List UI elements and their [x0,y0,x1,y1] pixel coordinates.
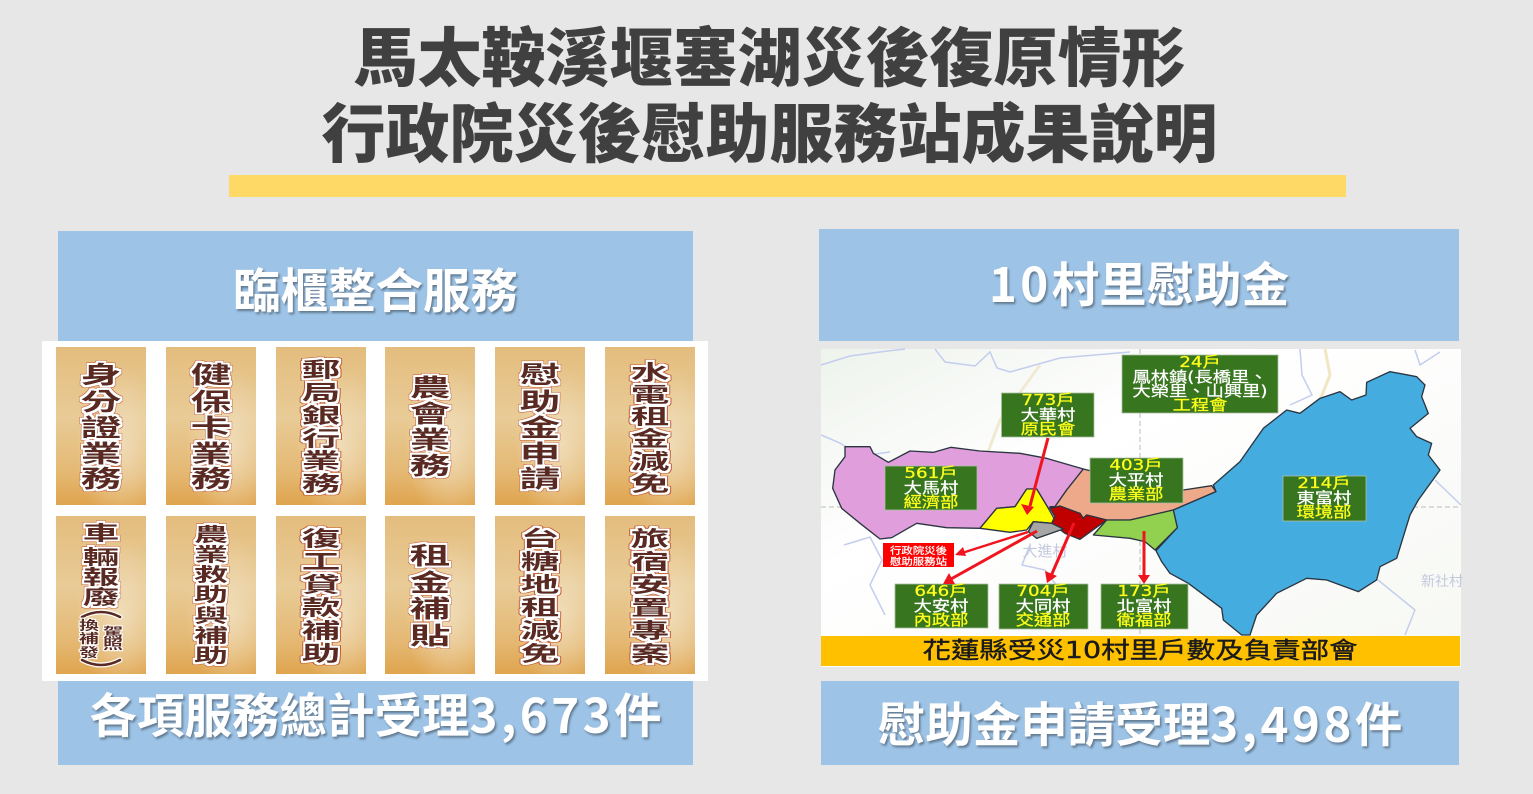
card: health card services: 保 [191,382,231,417]
text: service total: 各項服務總計受理3,673件 [89,678,662,747]
card: lodging program: 置 [631,591,669,621]
label: Dama village: 大馬村 [904,479,959,497]
label: Dongfu village: 東富村 [1297,489,1352,507]
label: Daping village [1090,456,1183,503]
card: agricultural relief: 補 [194,620,228,647]
card: Taisugar land rent reduction: 台 [521,522,559,552]
card: lodging program: 旅 [631,522,669,552]
label: Fenglin township: 24戶 [1179,353,1221,371]
label: Dama village [885,464,977,511]
card: ID services: 務 [81,459,121,494]
card: ID services: 業 [81,434,121,469]
map rivers and roads: 新社村 [1421,574,1463,590]
title: 馬太鞍溪堰塞湖災後復原情形 [354,8,1186,100]
card: rent subsidy: 貼 [410,616,450,651]
card: farmers association services [385,347,475,505]
card: utilities and rent reduction: 減 [631,445,669,475]
map caption bar [821,636,1460,666]
card: vehicle scrapping: 駕 [103,622,123,641]
region: service station [1028,522,1063,538]
region: Dongfu village [1156,372,1440,635]
label: Beifu village: 衛福部 [1117,611,1171,629]
label: Daan village [895,582,988,629]
heading: village aid: 10村里慰助金 [989,247,1289,316]
label: service station [883,543,954,568]
card: aid application: 慰 [520,355,560,390]
label: Daan village: 646戶 [914,582,968,600]
card: ID services: 證 [81,408,121,443]
card: recovery loan subsidy [276,516,366,674]
card: post office and bank services [276,347,366,505]
title: 行政院災後慰助服務站成果說明 [322,84,1218,176]
card: post office and bank services: 行 [302,422,340,452]
card: post office and bank services: 郵 [302,353,340,383]
arrow: to service station label [955,532,1028,556]
region: Datong village [1050,506,1107,539]
region: Daping village [1050,469,1216,520]
card: lodging program [605,516,695,674]
card: ID services: 身 [81,355,121,390]
title underline [229,175,1346,197]
card: utilities and rent reduction: 電 [631,378,669,408]
region: Beifu village [1093,510,1177,550]
region: Dama village [833,447,1083,539]
card: utilities and rent reduction: 水 [631,356,669,386]
panel footer: service total [58,681,693,765]
text: aid total: 慰助金申請受理3,498件 [878,687,1402,756]
card: Taisugar land rent reduction: 地 [521,568,559,598]
card: aid application: 申 [520,434,560,469]
card: vehicle scrapping: 換 [79,615,99,634]
card: Taisugar land rent reduction: 免 [521,637,559,667]
card: vehicle scrapping: 車 [83,518,119,546]
card: agricultural relief [166,516,256,674]
card: lodging program: 專 [631,614,669,644]
label: service station: 慰助服務站 [890,556,948,568]
card: utilities and rent reduction [605,347,695,505]
card: rent subsidy [385,516,475,674]
card: aid application [495,347,585,505]
label: Daping village: 403戶 [1109,456,1163,474]
map of ten villages [821,349,1463,667]
card: agricultural relief: 農 [194,519,228,546]
label: Dahua village: 大華村 [1021,406,1076,424]
arrow: to Datong village [1045,523,1074,583]
village regions [833,372,1440,635]
card: recovery loan subsidy: 工 [302,545,340,575]
region: Dahua village [980,489,1054,532]
card: health card services: 卡 [191,408,231,443]
card: vehicle scrapping [56,516,146,674]
card: Taisugar land rent reduction: 減 [521,614,559,644]
card: vehicle scrapping: 補 [79,628,99,647]
card: utilities and rent reduction: 金 [631,422,669,452]
card: recovery loan subsidy: 助 [302,637,340,667]
card: farmers association services: 會 [410,394,451,429]
card: utilities and rent reduction: 租 [631,400,669,430]
title [322,8,1218,176]
label: Dahua village [1002,391,1094,438]
label: Dama village: 經濟部 [904,493,958,511]
map rivers and roads: 大進村 [1022,542,1068,560]
arrow: to Dahua village [1021,438,1048,515]
label: Fenglin township: 鳳林鎮(長橋里、 [1132,368,1268,386]
label: Dahua village: 原民會 [1021,420,1076,438]
card: farmers association services: 業 [410,420,450,455]
card: post office and bank services: 業 [302,444,340,474]
label: Datong village: 大同村 [1016,597,1071,615]
label: Beifu village: 北富村 [1117,597,1172,615]
card: agricultural relief: 與 [194,600,228,627]
card: vehicle scrapping: 報 [83,562,119,590]
service cards panel [42,341,708,681]
card: vehicle scrapping: 照 [103,634,123,653]
label: Fenglin township: 工程會 [1173,396,1228,414]
card: farmers association services: 農 [410,368,450,403]
card: Taisugar land rent reduction: 租 [521,591,559,621]
card: post office and bank services: 局 [302,376,340,406]
card: ID services: 分 [81,382,121,417]
label: Daan village: 內政部 [914,611,968,629]
label: Datong village [999,582,1088,629]
heading: counter services: 臨櫃整合服務 [233,253,518,322]
card: agricultural relief: 救 [194,559,229,586]
card: vehicle scrapping: 廢 [83,582,119,610]
card: vehicle scrapping: 發 [79,642,99,661]
card: utilities and rent reduction: 免 [631,467,669,497]
card: aid application: 金 [520,408,560,443]
card: health card services: 健 [191,355,231,390]
card: lodging program: 案 [631,637,669,667]
arrow: to Daan village [943,531,1037,584]
label: Beifu village [1101,582,1188,629]
card: farmers association services: 務 [410,446,450,481]
label: Beifu village: 173戶 [1117,582,1171,600]
label: Dongfu village: 環境部 [1297,503,1351,521]
card: recovery loan subsidy: 貸 [302,568,340,598]
card: rent subsidy: 補 [410,589,450,624]
label: service station: 行政院災後 [890,545,947,557]
label: Dongfu village [1283,474,1366,521]
label: Daping village: 大平村 [1109,471,1164,489]
card: aid application: 請 [520,459,560,494]
card: recovery loan subsidy: 補 [302,614,340,644]
card: rent subsidy: 金 [410,563,450,598]
label: Daping village: 農業部 [1109,485,1163,503]
card: recovery loan subsidy: 復 [302,522,340,552]
card: Taisugar land rent reduction [495,516,585,674]
card: lodging program: 安 [631,568,669,598]
label: Datong village: 交通部 [1016,611,1070,629]
card: aid application: 助 [520,382,560,417]
card: health card services [166,347,256,505]
panel footer: aid total [821,681,1459,765]
card: agricultural relief: 助 [194,579,228,606]
card: health card services: 務 [191,459,231,494]
label: Dahua village: 773戶 [1021,391,1075,409]
card: health card services: 業 [191,434,231,469]
card: agricultural relief: 助 [194,640,228,667]
card: recovery loan subsidy: 款 [302,591,340,621]
map rivers and roads [821,349,1463,667]
panel header: counter services [58,231,693,341]
arrow: to Beifu village [1138,531,1150,584]
panel header: village aid [819,229,1459,341]
card: post office and bank services: 銀 [302,399,340,429]
label: Datong village: 704戶 [1016,582,1070,600]
card: post office and bank services: 務 [302,467,340,497]
map caption bar: 花蓮縣受災10村里戶數及負責部會 [922,638,1358,664]
label: Dongfu village: 214戶 [1297,474,1351,492]
card: vehicle scrapping: 輛 [83,542,119,570]
label: Dama village: 561戶 [904,464,958,482]
label: Fenglin township [1122,353,1278,414]
label: Daan village: 大安村 [914,597,969,615]
card: ID services [56,347,146,505]
card: agricultural relief: 業 [194,539,228,566]
label: Fenglin township: 大榮里、山興里) [1132,382,1268,400]
card: Taisugar land rent reduction: 糖 [521,545,559,575]
card: rent subsidy: 租 [410,536,450,571]
card: lodging program: 宿 [631,545,669,575]
